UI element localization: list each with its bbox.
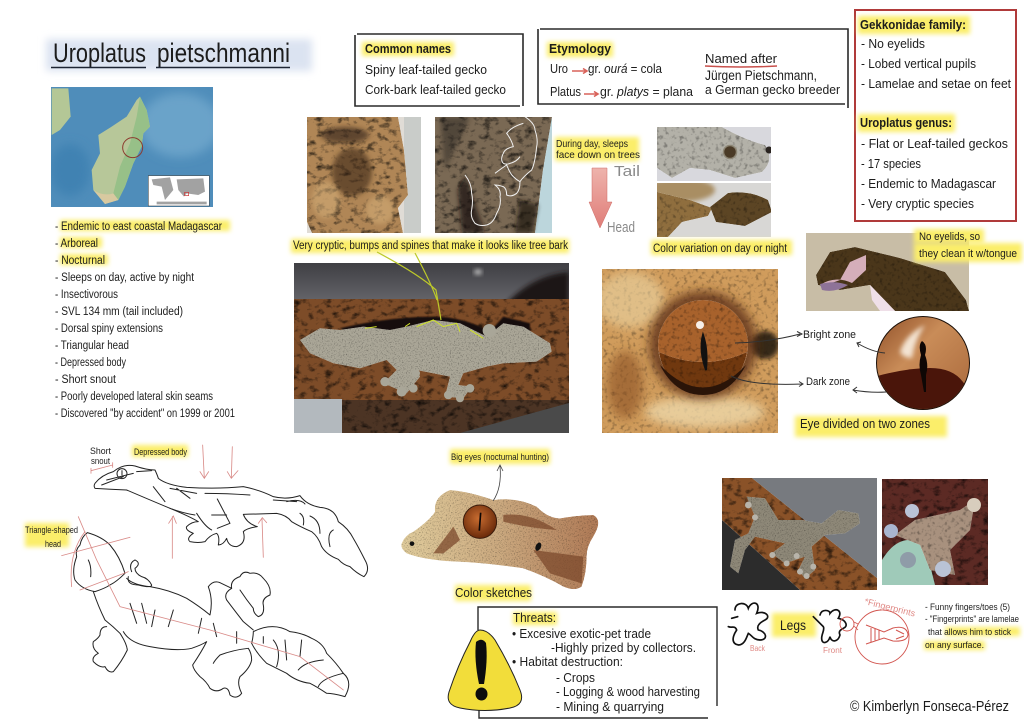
label: legs: Legs (780, 617, 806, 633)
arrow: tail to head: Tail (614, 163, 640, 180)
label: triangle head: Triangle-shaped (25, 525, 78, 536)
panel: family and genus: - No eyelids (861, 37, 925, 51)
species facts list: - Poorly developed lateral skin seams (55, 391, 213, 403)
panel: threats: - Crops (556, 671, 595, 685)
photo: gecko on diagonal branch (722, 478, 877, 590)
label: big eyes (450, 449, 550, 501)
caption: colour variation: Color variation on day or night (653, 243, 788, 255)
panel: threats: - Logging & wood harvesting (556, 685, 700, 699)
callout lines to spines (377, 252, 441, 320)
line drawing: gecko side view (91, 445, 368, 577)
icon: front foot (813, 610, 846, 643)
note: no eyelids: they clean it w/tongue (919, 248, 1017, 260)
arrow: dark zone (731, 376, 850, 388)
panel: etymology: Jürgen Pietschmann, (705, 68, 817, 83)
species facts list: - Discovered "by accident" on 1999 or 2001 (55, 408, 235, 420)
label: legs (772, 613, 816, 637)
label: depressed body: Depressed body (134, 447, 187, 458)
note: fingers and lamellae: on any surface. (925, 640, 984, 651)
panel: etymology: Etymology (549, 41, 612, 56)
title: Uroplatus (53, 38, 146, 68)
panel: common names: Cork-bark leaf-tailed gecko (365, 82, 506, 97)
caption: eye zones: Eye divided on two zones (800, 416, 930, 431)
panel: etymology: Named after (705, 51, 778, 66)
note: no eyelids (914, 229, 1022, 262)
sleeping posture note: During day, sleeps (556, 138, 628, 150)
sleeping posture note: face down on trees (556, 149, 640, 161)
panel: family and genus: Uroplatus genus: (860, 115, 952, 130)
panel: family and genus: - Flat or Leaf-tailed geckos (861, 137, 1008, 151)
label: fingerprints: *Fingerprints (864, 596, 917, 619)
arrow: bright zone: Bright zone (803, 329, 856, 341)
species facts list: - Triangular head (55, 340, 129, 352)
label: short snout: Short (90, 446, 111, 457)
icon: warning triangle (448, 630, 522, 710)
label: big eyes: Big eyes (nocturnal hunting) (451, 452, 549, 463)
panel: family and genus: Gekkonidae family: (860, 17, 966, 32)
note: fingers and lamellae: that allows him to stick (928, 627, 1011, 638)
title (46, 38, 312, 71)
arrow: bright zone (735, 329, 856, 343)
panel: etymology: gr. ourá = cola (588, 61, 663, 76)
species facts list: - Depressed body (55, 357, 126, 369)
photo: gecko night colour (657, 183, 771, 237)
colour sketch: gecko head (401, 490, 598, 589)
arrow: tail to head: Head (607, 219, 635, 236)
panel: threats: -Highly prized by collectors. (551, 641, 696, 655)
sleeping posture note (555, 137, 640, 161)
species facts list (55, 220, 235, 420)
eye illustration (852, 316, 970, 410)
panel: family and genus (855, 10, 1016, 221)
panel: etymology: gr. platys = plana (600, 84, 694, 99)
note: fingers and lamellae (924, 602, 1020, 651)
species facts list: - Insectivorous (55, 289, 118, 301)
panel: etymology: Platus (550, 84, 581, 99)
caption: eye zones (795, 416, 947, 437)
panel: threats: Threats: (513, 610, 556, 625)
panel: threats: • Habitat destruction: (512, 655, 623, 669)
species facts list: - Endemic to east coastal Madagascar (55, 221, 222, 233)
panel: etymology: Uro (550, 61, 568, 76)
label: triangle head: head (45, 539, 61, 550)
arrow: dark zone: Dark zone (806, 376, 850, 388)
panel: threats: • Excesive exotic-pet trade (512, 627, 651, 641)
photo: gecko day colour (657, 127, 772, 181)
panel: threats: - Mining & quarrying (556, 700, 664, 714)
panel: common names: Spiny leaf-tailed gecko (365, 62, 487, 77)
species facts list: - Arboreal (55, 238, 98, 250)
note: no eyelids: No eyelids, so (919, 231, 980, 243)
map of Madagascar (50, 87, 220, 207)
arrow: tail to head (589, 163, 640, 236)
panel: family and genus: - Endemic to Madagascar (861, 177, 996, 191)
panel: etymology (538, 29, 848, 108)
panel: family and genus: - Lobed vertical pupils (861, 57, 976, 71)
label: front: Front (823, 646, 843, 655)
panel: common names (355, 34, 523, 106)
panel: etymology: a German gecko breeder (705, 82, 841, 97)
photo: gecko licking eye (806, 233, 969, 311)
panel: family and genus: - Very cryptic species (861, 197, 974, 211)
diagram: fingerprint magnifier (840, 610, 909, 664)
species facts list: - Dorsal spiny extensions (55, 323, 163, 335)
photo: gecko underside on glass (882, 479, 988, 585)
label: triangle head (25, 523, 78, 550)
panel: common names: Common names (365, 42, 451, 56)
caption: cryptic bark: Very cryptic, bumps and spines that make it looks like tree bark (293, 240, 568, 252)
species facts list: - Short snout (55, 374, 117, 386)
panel: threats (478, 607, 717, 718)
species facts list: - SVL 134 mm (tail included) (55, 306, 183, 318)
photo: gecko on branch (294, 263, 569, 433)
note: fingers and lamellae: - Funny fingers/toes (5) (925, 602, 1010, 613)
species facts list: - Nocturnal (55, 255, 105, 267)
species facts list: - Sleeps on day, active by night (55, 272, 195, 284)
title: pietschmanni (157, 38, 290, 68)
photo: cork bark (307, 117, 421, 233)
line drawing: gecko top view (62, 517, 349, 697)
panel: family and genus: - 17 species (861, 157, 921, 171)
label: back: Back (750, 644, 766, 653)
label: short snout: snout (91, 456, 110, 467)
label: short snout (90, 446, 111, 467)
label: depressed body (132, 445, 188, 458)
icon: back foot (728, 603, 768, 645)
photo: gecko eye close-up (596, 269, 779, 433)
photo: camouflaged gecko on bark with outline (435, 117, 552, 233)
panel: family and genus: - Lamelae and setae on feet (861, 77, 1012, 91)
label: colour sketches: Color sketches (455, 586, 532, 600)
